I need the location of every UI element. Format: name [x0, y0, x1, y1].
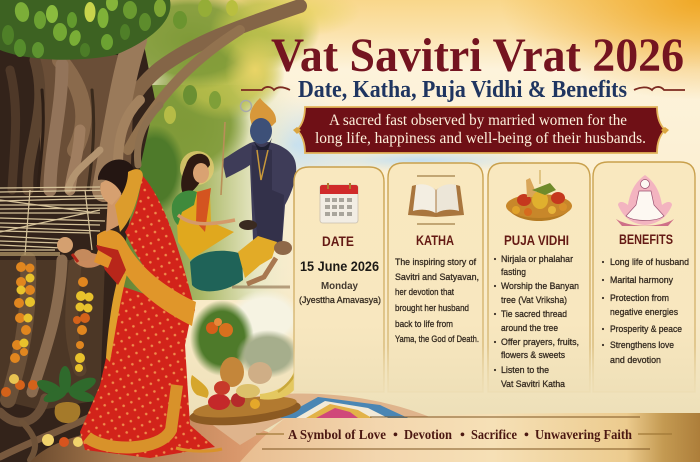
panel: puja vidhi [488, 163, 590, 392]
text block: katha story: brought her husband [395, 303, 469, 314]
saree hem border [87, 385, 177, 447]
blouse and arm [96, 245, 126, 285]
subtitle: Date, Katha, Puja Vidhi & Benefits [298, 77, 627, 103]
footer strip [240, 413, 700, 462]
list: benefits: and devotion [610, 355, 661, 366]
gold sash [97, 230, 196, 326]
list: benefits [602, 257, 689, 366]
list: puja steps: around the tree [501, 323, 558, 334]
hands [57, 237, 73, 253]
title: Vat Savitri Vrat 2026 [271, 29, 684, 82]
banner [293, 107, 669, 153]
panel: date: DATE [322, 233, 354, 249]
panel: katha: KATHA [416, 232, 454, 248]
illustration: flowers and fruit offering [188, 300, 302, 430]
list: benefits: Long life of husband [610, 257, 689, 268]
illustration: Yama [221, 98, 296, 245]
list: puja steps [494, 254, 579, 390]
marigold garlands [1, 262, 94, 397]
text block: katha story [395, 257, 479, 345]
text block: katha story: The inspiring story of [395, 257, 476, 268]
canopy leaves [0, 0, 238, 124]
panel: puja vidhi: PUJA VIDHI [504, 232, 569, 248]
panel: date: Monday [321, 280, 358, 292]
text block: katha story: Yama, the God of Death. [395, 334, 479, 345]
list: puja steps: Listen to the [501, 365, 549, 376]
illustration: woman in red saree [57, 160, 222, 458]
list: benefits: Marital harmony [610, 275, 673, 286]
footer strip: Sacrifice [471, 428, 517, 443]
list: puja steps: Worship the Banyan [501, 281, 579, 292]
list: puja steps: Vat Savitri Katha [501, 379, 566, 390]
banner: long life, happiness and well-being of their husbands. [315, 130, 646, 147]
panel: date: (Jyesttha Amavasya) [299, 295, 381, 306]
list: puja steps: tree (Vat Vriksha) [501, 295, 567, 306]
panel: date [294, 167, 384, 392]
list: benefits: Strengthens love [610, 340, 674, 351]
illustration: Savitri [172, 151, 235, 260]
footer strip: Unwavering Faith [535, 428, 632, 443]
pallu over shoulder [125, 175, 195, 325]
icon: puja thali [506, 170, 572, 221]
list: puja steps: Offer prayers, fruits, [501, 337, 579, 348]
scene backdrop [120, 85, 300, 300]
face, neck, hair [106, 195, 125, 232]
text block: katha story: back to life from [395, 319, 453, 330]
icon: open book [408, 176, 464, 224]
distant foliage [110, 0, 360, 215]
footer strip: Devotion [404, 428, 452, 443]
icon: meditating figure on lotus [616, 175, 674, 226]
list: puja steps: fasting [501, 267, 526, 278]
illustration: Satyavan [190, 220, 292, 291]
trunk mass [0, 25, 155, 462]
footer strip: • [524, 428, 529, 443]
icon: calendar [320, 183, 358, 223]
panel: benefits: BENEFITS [619, 231, 673, 247]
skirt [80, 285, 215, 458]
list: benefits: Prosperity & peace [610, 324, 682, 335]
footer strip: A Symbol of Love [288, 428, 386, 443]
text block: katha story: Savitri and Satyavan, [395, 272, 479, 283]
footer strip: • [393, 428, 398, 443]
panel: date: 15 June 2026 [300, 259, 379, 274]
floor and rangoli [30, 393, 430, 462]
illustration: banyan tree [0, 0, 360, 462]
banner: A sacred fast observed by married women for the [329, 112, 627, 129]
list: benefits: Protection from [610, 293, 669, 304]
list: puja steps: flowers & sweets [501, 350, 565, 361]
list: puja steps: Nirjala or phalahar [501, 254, 573, 265]
panel: katha [388, 163, 483, 392]
aerial roots [0, 6, 300, 460]
list: benefits: negative energies [610, 307, 678, 318]
footer strip: • [460, 428, 465, 443]
list: puja steps: Tie sacred thread [501, 309, 567, 320]
panel: benefits [593, 162, 695, 392]
brass pot with leaves [35, 366, 98, 423]
text block: katha story: her devotion that [395, 287, 454, 298]
sacred threads [0, 187, 118, 255]
